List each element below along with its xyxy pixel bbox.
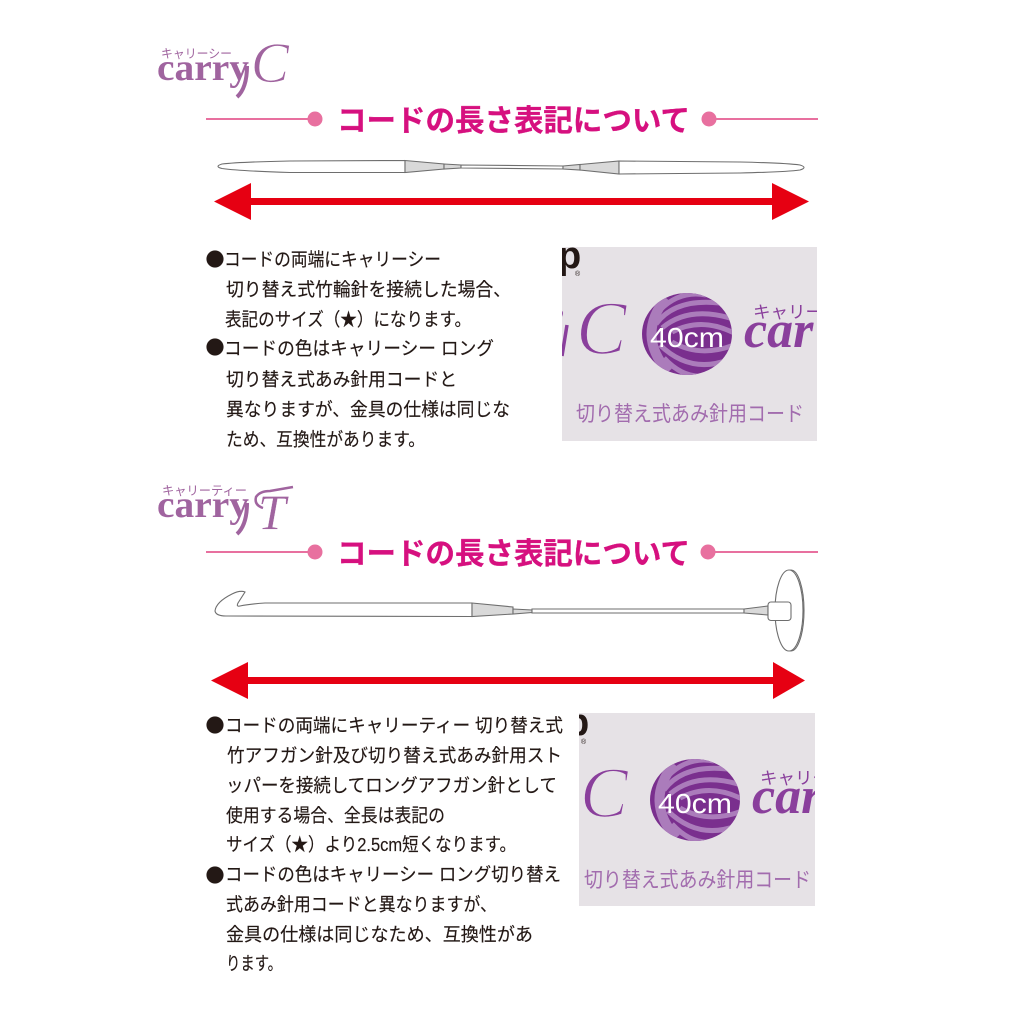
logo: carry T: T [258, 484, 289, 540]
illustration: afghan hook with cord and stopper [215, 570, 804, 651]
text block: carry C notes [206, 249, 511, 450]
text block: carry T notes: 式あみ針用コードと異なりますが、 [226, 894, 497, 915]
heading: cord length notation, carry T [206, 538, 818, 571]
text block: carry T notes: ります。 [226, 953, 282, 974]
heading: cord length notation, carry C [206, 105, 818, 138]
text block: carry T notes: ッパーを接続してロングアフガン針として [226, 775, 557, 796]
text block: carry T notes [206, 715, 563, 974]
logo: carry T: キャリーティー [162, 484, 247, 498]
photo: 40cm cord package label, carry C [523, 235, 823, 441]
text block: carry C notes: ため、互換性があります。 [226, 429, 425, 450]
text block: carry T notes: 金具の仕様は同じなため、互換性があ [226, 924, 533, 945]
photo: 40cm cord package label, carry C: キャリー [753, 303, 823, 322]
logo: carry C [157, 32, 290, 97]
illustration: double-ended bamboo needle cord [218, 160, 804, 174]
logo: carry T [157, 484, 293, 540]
photo: 40cm cord package label, carry C: 40cm [650, 322, 724, 353]
photo: 40cm cord package label, carry C: car [744, 302, 814, 359]
text block: carry C notes: 異なりますが、金具の仕様は同じな [226, 399, 510, 420]
text block: carry C notes: 切り替え式竹輪針を接続した場合、 [226, 279, 511, 300]
text block: carry C notes: コードの色はキャリーシー ロング [224, 338, 494, 359]
heading: cord length notation, carry T: コードの長さ表記について [337, 538, 690, 571]
text block: carry T notes: サイズ（★）より2.5cm短くなります。 [226, 834, 516, 855]
text block: carry T notes: 使用する場合、全長は表記の [226, 805, 445, 826]
photo: 40cm cord package label, carry T: ® [581, 738, 587, 746]
logo: carry C: carry [157, 47, 249, 89]
heading: cord length notation, carry C: コードの長さ表記について [337, 105, 690, 138]
text block: carry C notes: コードの両端にキャリーシー [224, 249, 441, 270]
arrow: full length, carry C [214, 183, 809, 220]
photo: 40cm cord package label, carry T: p [566, 702, 589, 744]
text block: carry C notes: 切り替え式あみ針用コードと [226, 369, 457, 390]
text block: carry T notes: コードの両端にキャリーティー 切り替え式 [225, 715, 563, 736]
photo: 40cm cord package label, carry C: ® [575, 270, 581, 278]
logo: carry T: carry [157, 484, 249, 526]
photo: 40cm cord package label, carry C: y [523, 280, 563, 362]
photo: 40cm cord package label, carry T: 40cm [658, 788, 732, 819]
photo: 40cm cord package label, carry T: 切り替え式あみ針用コード [584, 869, 811, 892]
photo: 40cm cord package label, carry T: car [752, 768, 822, 825]
logo: carry C: キャリーシー [161, 47, 232, 61]
photo: 40cm cord package label, carry T: キャリー [760, 769, 830, 788]
logo: carry C: C [251, 32, 290, 95]
text block: carry T notes: コードの色はキャリーシー ロング切り替え [225, 864, 561, 885]
photo: 40cm cord package label, carry C: p [558, 235, 581, 277]
photo: 40cm cord package label, carry C: C [576, 287, 628, 371]
photo: 40cm cord package label, carry T [566, 702, 830, 906]
text block: carry T notes: 竹アフガン針及び切り替え式あみ針用スト [227, 745, 562, 766]
arrow: full length, carry T [211, 662, 805, 699]
text block: carry C notes: 表記のサイズ（★）になります。 [225, 309, 471, 330]
photo: 40cm cord package label, carry T: C [580, 753, 629, 833]
photo: 40cm cord package label, carry C: 切り替え式あみ針用コード [576, 403, 804, 426]
